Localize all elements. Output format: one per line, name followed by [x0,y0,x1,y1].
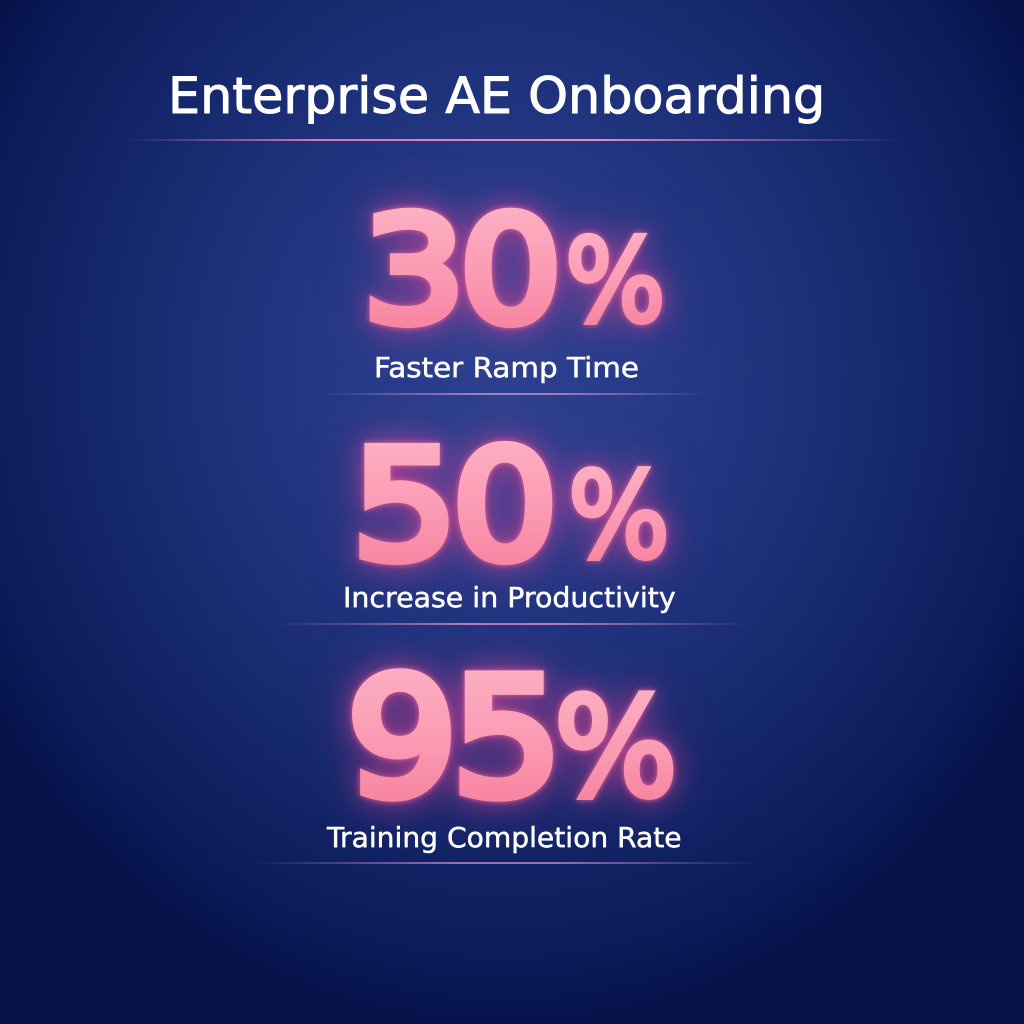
number: 50%: % [568,447,670,585]
number: 50% [352,419,670,594]
label: training completion rate: Training Completion Rate [327,821,682,854]
number: 30%: 30 [363,187,556,356]
title: Enterprise AE Onboarding [168,67,825,125]
label: increase in productivity: Increase in Productivity [343,581,676,614]
divider [275,623,750,625]
divider [320,393,710,395]
number: 30% [363,187,666,356]
divider [250,862,760,864]
number: 50%: 50 [352,419,552,594]
number: 95%: % [554,668,678,828]
number: 95% [347,643,678,833]
title divider [125,139,905,141]
number: 30%: % [565,215,666,349]
label: faster ramp time: Faster Ramp Time [374,351,639,384]
number: 95%: 95 [347,643,557,833]
